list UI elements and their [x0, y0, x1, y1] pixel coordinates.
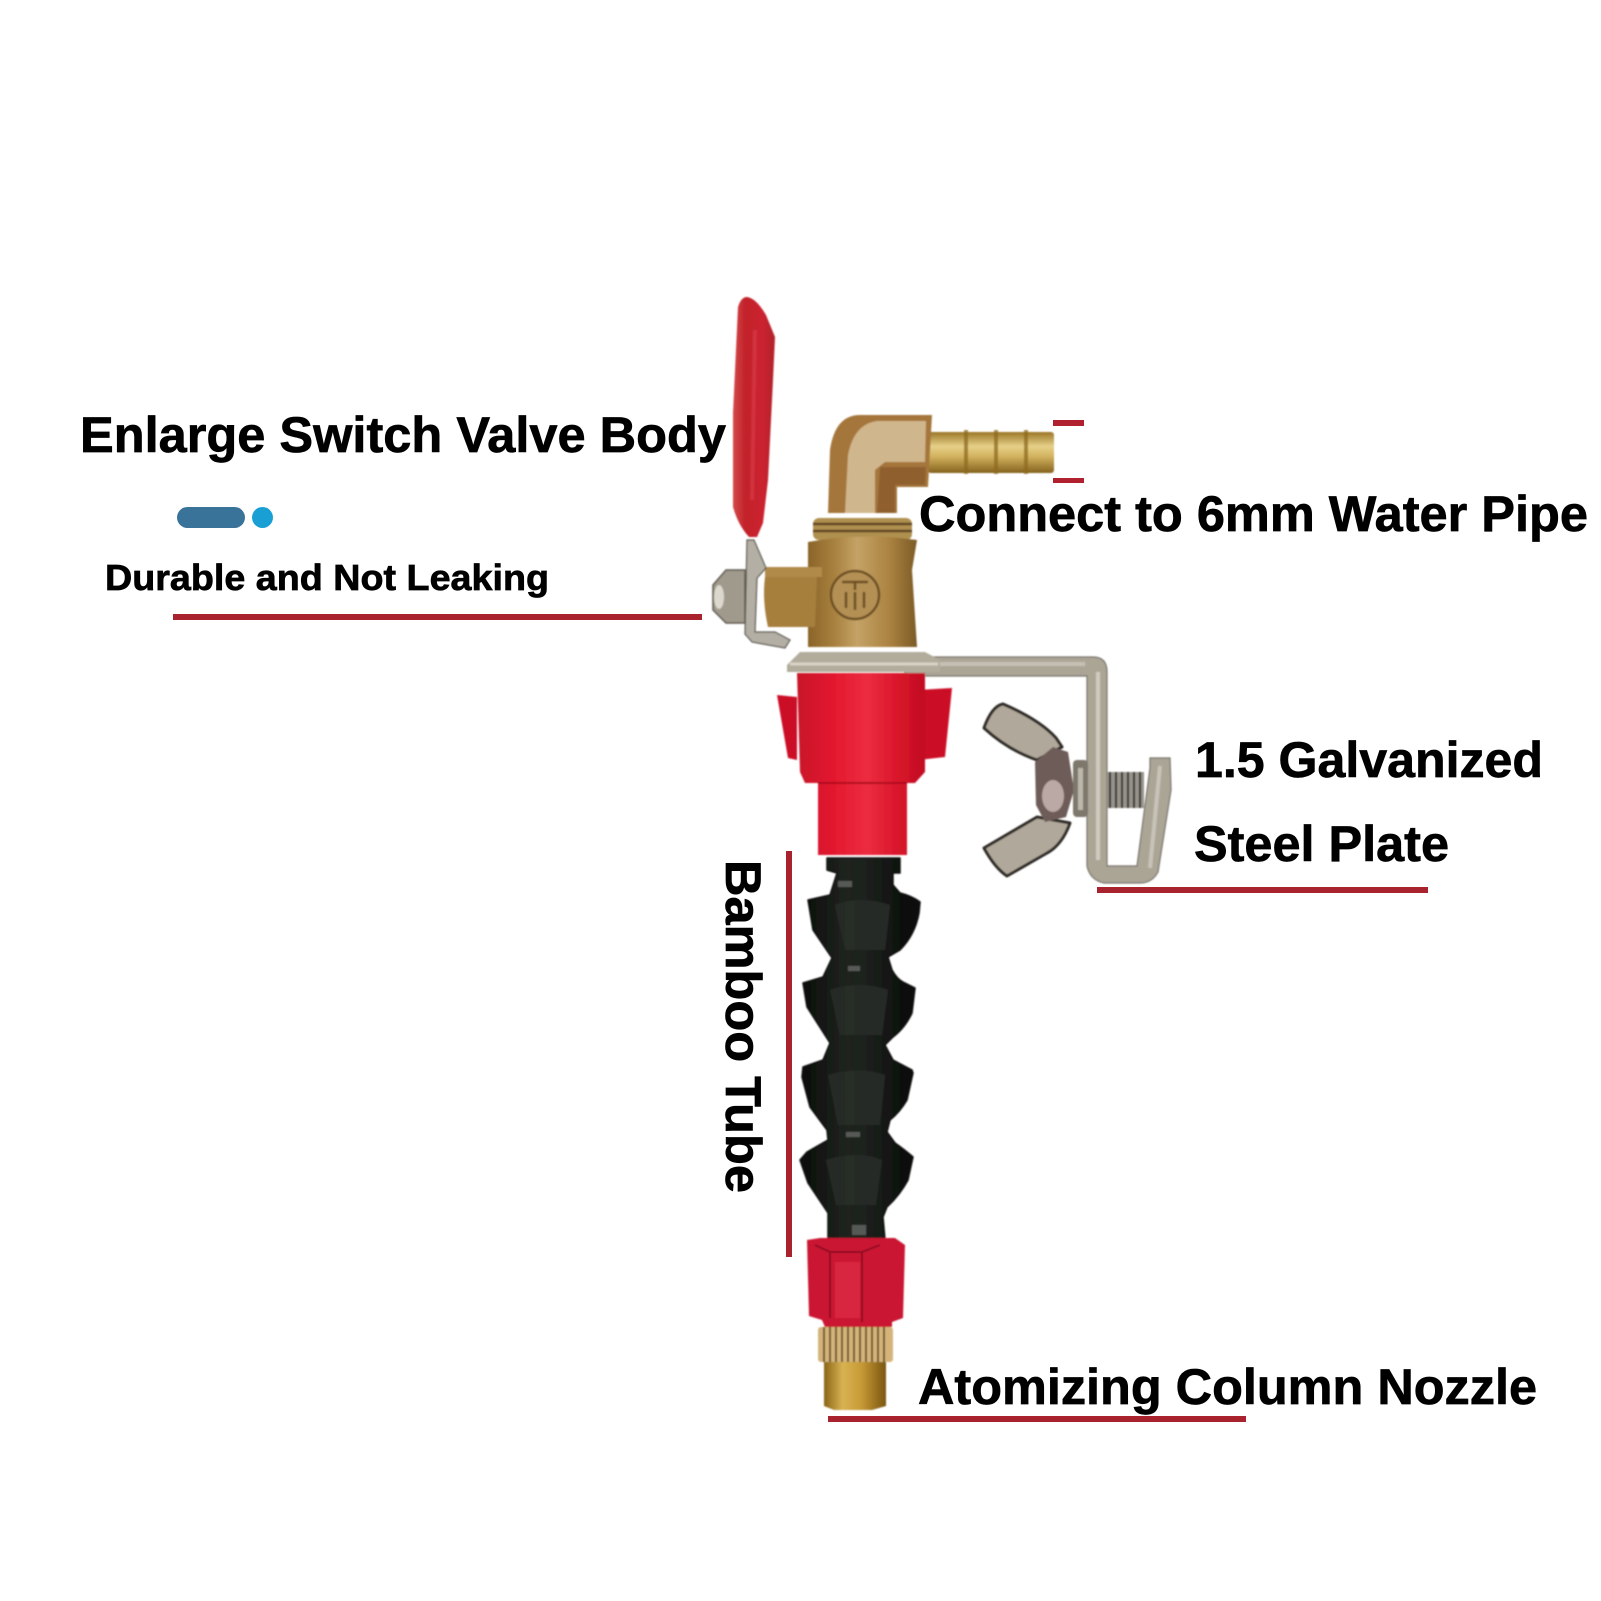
icon: red coupling	[777, 673, 952, 855]
heading: steel plate line two: Steel Plate	[1194, 816, 1449, 872]
marker: pipe diameter bottom	[1053, 478, 1084, 483]
icon: brass atomizing nozzle	[818, 1327, 893, 1410]
product: nozzle valve assembly	[713, 297, 1171, 1410]
icon: steel bracket	[905, 657, 1171, 883]
icon: base plate	[787, 652, 940, 672]
icon: red hex nut	[807, 1238, 905, 1327]
icon: pill and dot	[177, 507, 273, 528]
text: durable: Durable and Not Leaking	[105, 557, 549, 598]
leader line: bamboo tube	[786, 851, 792, 1257]
icon: brass elbow and barb	[828, 415, 1054, 513]
heading: bamboo tube: Bamboo Tube	[715, 860, 771, 1193]
leader line: steel plate	[1097, 887, 1428, 893]
icon: lever strap and nut	[713, 540, 790, 648]
icon: black bamboo tube	[800, 858, 920, 1240]
icon: red handle	[733, 297, 775, 537]
heading: valve body: Enlarge Switch Valve Body	[80, 407, 726, 463]
leader line: nozzle	[828, 1416, 1246, 1422]
leader line: valve body	[173, 614, 702, 620]
heading: nozzle: Atomizing Column Nozzle	[918, 1359, 1537, 1415]
heading: steel plate line one: 1.5 Galvanized	[1195, 732, 1543, 788]
marker: pipe diameter top	[1053, 420, 1084, 426]
icon: brass valve body	[764, 518, 917, 647]
heading: water pipe: Connect to 6mm Water Pipe	[919, 486, 1588, 542]
icon: wing nut and bolt	[984, 704, 1144, 876]
